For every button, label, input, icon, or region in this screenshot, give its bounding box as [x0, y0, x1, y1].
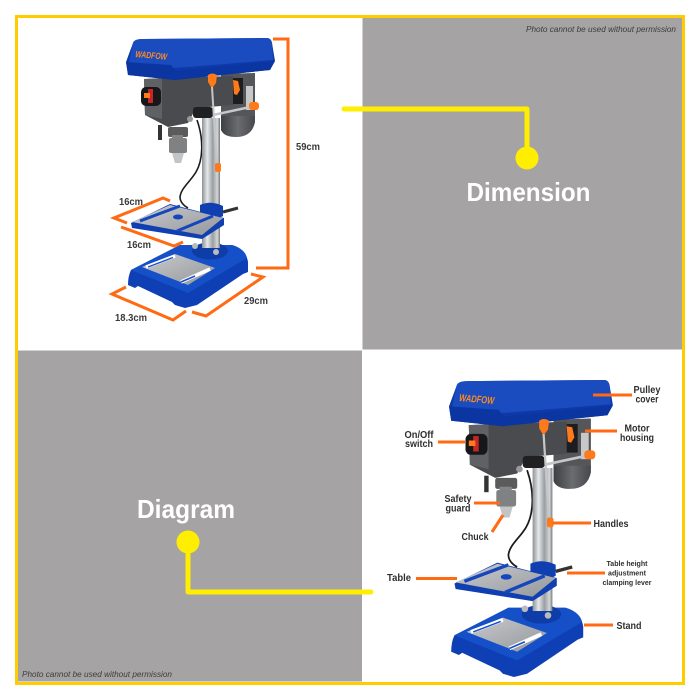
callout: stand: Stand — [616, 620, 642, 632]
panel: diagram background — [17, 350, 362, 682]
callout: safety guard: Safety — [444, 493, 472, 505]
drill press photo: diagram panel: WADFOW — [459, 393, 496, 407]
callout: handles — [552, 518, 629, 530]
dimension line: table depth — [114, 198, 170, 223]
callout: pulley cover: cover — [636, 394, 658, 406]
callout: chuck: Chuck — [462, 531, 489, 543]
dimension line: height — [256, 39, 288, 268]
callout: stand — [584, 620, 642, 632]
dimension line: base width — [112, 287, 186, 320]
connector: dimension — [344, 109, 538, 170]
drill press photo: dimension panel — [126, 38, 275, 308]
label: 18.3cm: 18.3cm — [115, 312, 147, 324]
callout: table height adjustment clamping lever: Table height — [606, 559, 648, 568]
callout: table — [387, 572, 457, 584]
callout: motor housing: Motor — [624, 422, 650, 434]
label: 59cm: 59cm — [296, 141, 320, 153]
dimension line: base depth — [192, 274, 263, 316]
callout: motor housing — [585, 422, 654, 444]
label: 16cm upper: 16cm — [119, 196, 143, 208]
callout: motor housing: housing — [620, 432, 654, 444]
heading: Dimension: Dimension — [466, 177, 590, 207]
drill press photo: diagram panel — [449, 380, 613, 677]
label: 16cm lower: 16cm — [127, 239, 151, 251]
heading: Diagram: Diagram — [137, 494, 235, 524]
callout: pulley cover: Pulley — [634, 384, 661, 396]
photo notice top right: Photo cannot be used without permission — [526, 24, 676, 34]
callout: on/off switch: switch — [405, 438, 433, 450]
panel: dimension background — [362, 17, 682, 350]
callout: table height adjustment clamping lever — [567, 559, 652, 587]
callout: chuck — [462, 515, 503, 543]
connector: diagram — [176, 530, 371, 592]
drill press photo: dimension panel: WADFOW — [135, 49, 169, 62]
callout: on/off switch: On/Off — [404, 429, 434, 441]
callout: table height adjustment clamping lever: clamping lever — [602, 578, 652, 587]
callout: safety guard: guard — [446, 502, 470, 514]
dimension line: table width — [121, 227, 183, 246]
callout: on/off switch — [404, 429, 465, 450]
label: 29cm: 29cm — [244, 295, 268, 307]
callout: table height adjustment clamping lever: adjustment — [608, 568, 646, 578]
callout: handles: Handles — [594, 518, 629, 530]
callout: safety guard — [444, 493, 500, 514]
callout: table: Table — [387, 572, 411, 584]
photo notice bottom left: Photo cannot be used without permission — [22, 669, 172, 679]
callout: pulley cover — [593, 384, 661, 406]
